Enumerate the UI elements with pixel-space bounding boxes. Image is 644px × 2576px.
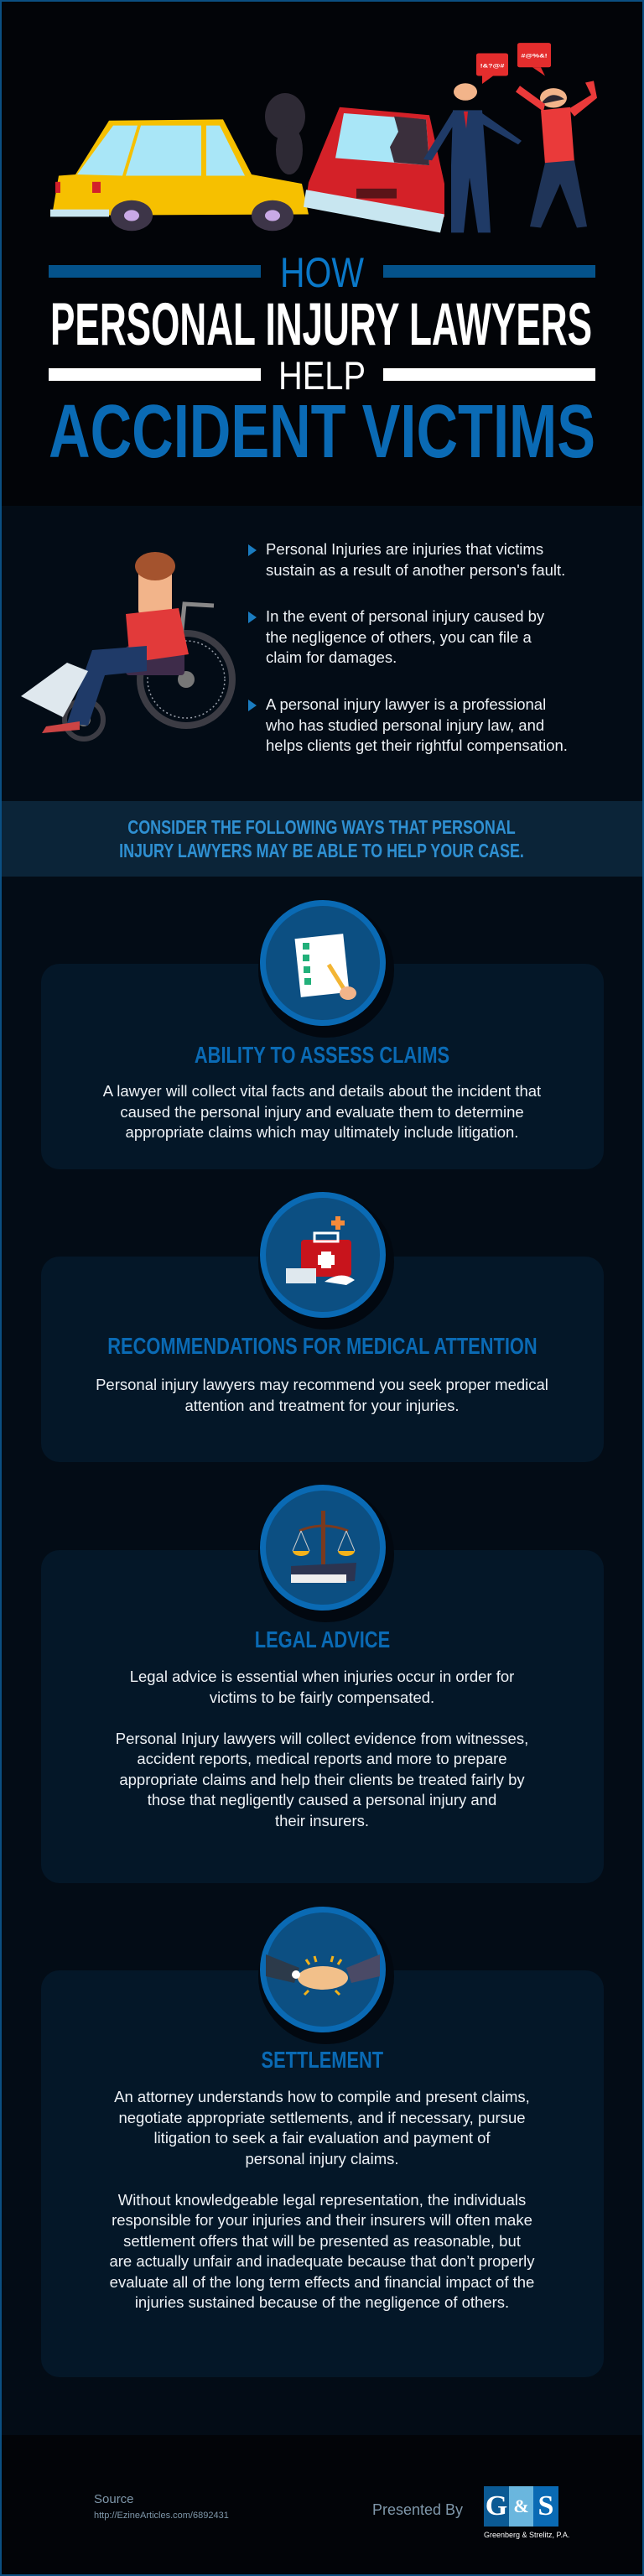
text: medical	[96, 1376, 548, 1414]
text: legal advice: Personal Injury lawyers will collect evidence from witnesses,	[116, 1730, 528, 1746]
bullet 3: A personal injury lawyer is a professional	[266, 695, 546, 713]
text: settlement: An attorney understands how to compile and present claims,	[114, 2088, 530, 2105]
text: legal advice: their insurers.	[275, 1812, 369, 1829]
businessman	[454, 83, 477, 101]
bullet 2	[266, 606, 635, 668]
bullet 1: sustain as a result of another person's fault.	[266, 560, 565, 579]
card 2: medical	[41, 1257, 604, 1462]
bullet 3: who has studied personal injury law, and	[266, 716, 544, 733]
logo: G&S: Greenberg & Strelitz, P.A.	[484, 2531, 569, 2539]
banner: consider the following	[0, 801, 644, 877]
heading: medical attention: RECOMMENDATIONS FOR MEDICAL ATTENTION	[107, 1333, 537, 1359]
logo: G&S: &	[513, 2495, 529, 2516]
text: settlement: Without knowledgeable legal representation, the individuals	[118, 2191, 526, 2208]
card 1: assess claims	[41, 964, 604, 1169]
angry man	[540, 88, 567, 107]
bullet 3: helps clients get their rightful compensation.	[266, 736, 568, 754]
text: legal advice: accident reports, medical reports and more to prepare	[137, 1750, 507, 1767]
text: settlement: litigation to seek a fair evaluation and payment of	[153, 2129, 491, 2147]
text: assess claims	[102, 1082, 541, 1141]
heading: ability to assess claims: ABILITY TO ASSESS CLAIMS	[195, 1042, 449, 1068]
logo: G&S: S	[538, 2490, 553, 2521]
red car	[306, 107, 444, 217]
wheelchair illustration	[21, 552, 236, 742]
header illustration: car crash and arguing men: !&?@#	[480, 62, 505, 69]
text: settlement: injuries sustained because of the negligence of others.	[135, 2293, 509, 2311]
icon: scales and book	[260, 1485, 386, 1611]
icon: handshake	[260, 1907, 386, 2032]
logo: G&S: G	[486, 2490, 507, 2521]
card 3: legal advice	[41, 1550, 604, 1883]
text: settlement: personal injury claims.	[245, 2149, 399, 2167]
card 4: settlement	[41, 1970, 604, 2377]
text: settlement: settlement offers that will be presented as reasonable, but	[123, 2231, 521, 2250]
text: settlement: negotiate appropriate settlements, and if necessary, pursue	[118, 2109, 526, 2126]
text: assess claims: caused the personal injury and evaluate them to determine	[120, 1102, 524, 1121]
icon: checklist	[260, 900, 386, 1026]
heading: settlement: SETTLEMENT	[261, 2047, 383, 2073]
heading: legal advice: LEGAL ADVICE	[254, 1626, 390, 1652]
logo: G&S	[484, 2486, 569, 2539]
bullet 2: claim for damages.	[266, 648, 397, 666]
text: legal advice: appropriate claims and help their clients be treated fairly by	[119, 1770, 525, 1788]
yellow car	[52, 119, 309, 216]
footer: source: http://EzineArticles.com/6892431	[94, 2511, 229, 2521]
title: HOW	[280, 249, 365, 296]
text: medical: attention and treatment for your injuries.	[184, 1396, 460, 1414]
banner: consider the following: INJURY LAWYERS MAY BE ABLE TO HELP YOUR CASE.	[120, 840, 524, 861]
text: legal advice: victims to be fairly compensated.	[210, 1688, 434, 1706]
smoke	[265, 93, 305, 139]
text: settlement	[109, 2088, 535, 2311]
banner: consider the following: CONSIDER THE FOLLOWING WAYS THAT PERSONAL	[128, 816, 516, 838]
footer: source	[94, 2492, 229, 2521]
bullet 1	[266, 539, 635, 580]
title: HELP	[278, 353, 366, 398]
bullet 2: In the event of personal injury caused by	[266, 607, 544, 625]
text: legal advice	[116, 1668, 528, 1829]
text: settlement: evaluate all of the long term effects and financial impact of the	[110, 2273, 534, 2290]
text: legal advice: those that negligently caused a personal injury and	[148, 1791, 496, 1808]
icon: medical kit	[260, 1192, 386, 1318]
footer: presented by: Presented By	[372, 2501, 463, 2518]
footer: source: Source	[94, 2492, 134, 2506]
text: legal advice: Legal advice is essential when injuries occur in order for	[130, 1668, 514, 1685]
speech bubbles	[476, 54, 508, 76]
text: medical: Personal injury lawyers may recommend you seek proper medical	[96, 1376, 548, 1393]
bullet 3	[266, 695, 635, 757]
text: assess claims: appropriate claims which may ultimately include litigation.	[126, 1123, 518, 1141]
bullet 2: the negligence of others, you can file a	[266, 627, 532, 646]
text: assess claims: A lawyer will collect vital facts and details about the incident that	[103, 1082, 541, 1100]
text: settlement: responsible for your injuries and their insurers will often make	[112, 2211, 532, 2229]
intro bullets	[248, 540, 568, 754]
header illustration: car crash and arguing men: #@%&!	[521, 53, 548, 59]
header illustration: car crash and arguing men	[50, 43, 597, 233]
title	[49, 249, 595, 466]
bullet 1: Personal Injuries are injuries that victims	[266, 540, 543, 558]
text: settlement: are actually unfair and inadequate because that don’t properly	[109, 2252, 535, 2270]
